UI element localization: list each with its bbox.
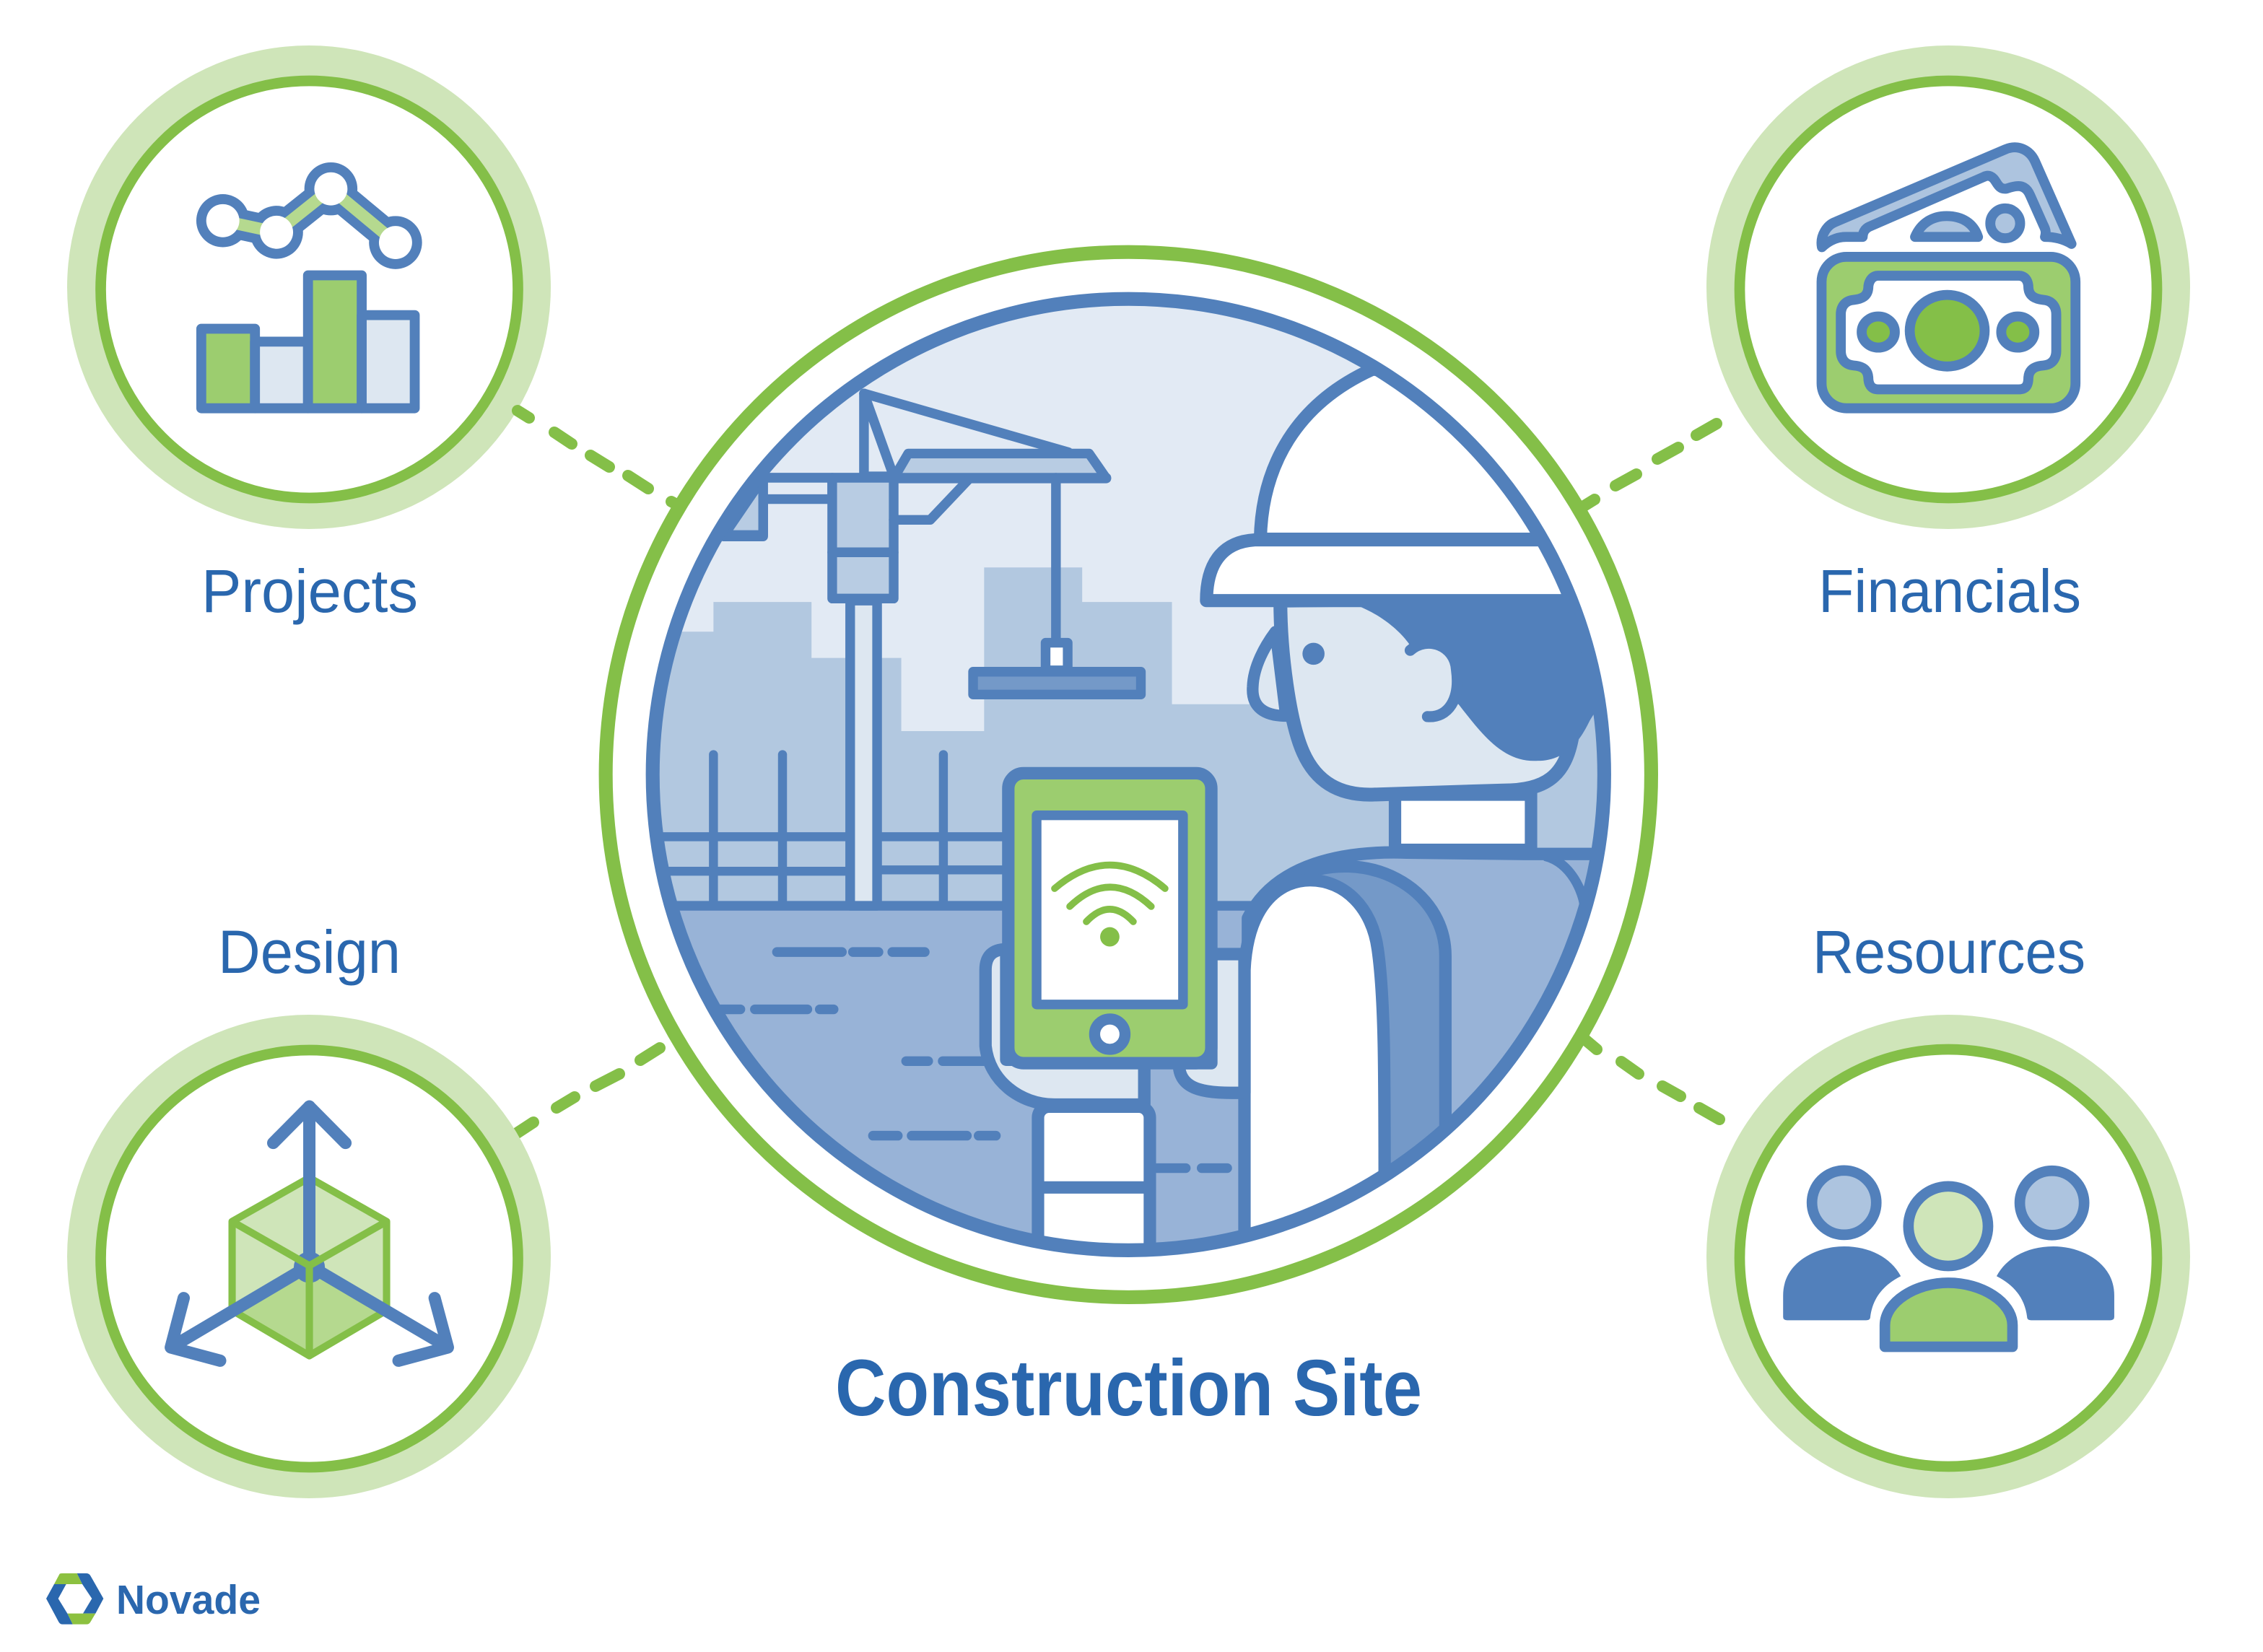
ground [680, 911, 1244, 1243]
city skyline [660, 567, 1597, 901]
worker: torso [1242, 846, 1592, 942]
icon: banknotes [1821, 147, 2075, 408]
worker: helmet [1200, 367, 1561, 608]
worker: sleeve arm [1244, 880, 1385, 1260]
scene: clipped illustration [660, 306, 1597, 1243]
connector: dashes to Resources [1583, 1038, 1719, 1119]
worker: eye [1302, 643, 1325, 665]
circle: Design badge [67, 1015, 551, 1498]
connector: dashes to Projects [518, 411, 682, 507]
worker: hair [1361, 607, 1590, 761]
worker: head [1281, 597, 1607, 795]
ground markings [720, 952, 1227, 1168]
fence [647, 755, 1006, 906]
circle: Projects badge [67, 45, 551, 529]
panel: Projects [67, 45, 551, 625]
crane [710, 393, 1141, 906]
circle: Financials badge [1706, 45, 2190, 529]
label: Financials: Financials [1818, 557, 2081, 625]
icon: hexagon logo [46, 1573, 103, 1625]
worker: ear line [1410, 643, 1457, 717]
icon: three people [1783, 1171, 2114, 1347]
label: Projects: Projects [201, 557, 418, 625]
inner blue ring [653, 299, 1604, 1250]
tablet [1008, 773, 1211, 1063]
outer green ring [606, 252, 1651, 1297]
wordmark: Novade [116, 1577, 261, 1623]
panel: Design [67, 918, 551, 1498]
worker: strap [1305, 860, 1452, 1163]
worker: nose [1252, 631, 1286, 716]
panel: construction site illustration [592, 252, 1651, 1297]
connector: dashes to Design [513, 1048, 660, 1136]
icon: line and bar chart [196, 162, 422, 408]
logo: Novade [46, 1573, 261, 1625]
panel: Resources [1706, 918, 2190, 1498]
connector: dashes to Financials [1579, 424, 1717, 509]
title: Construction Site [835, 1344, 1422, 1433]
icon: cube with 3D axes [171, 1106, 448, 1360]
worker: neck [1395, 795, 1531, 850]
panel: Financials [1706, 45, 2190, 625]
worker: shoulder edge [1545, 856, 1584, 904]
label: Design: Design [218, 918, 401, 986]
circle: Resources badge [1706, 1015, 2190, 1498]
worker: cuff [1038, 1106, 1150, 1272]
worker: arm behind tablet [985, 906, 1258, 1106]
sky [681, 306, 1361, 731]
label: Resources: Resources [1813, 918, 2085, 986]
